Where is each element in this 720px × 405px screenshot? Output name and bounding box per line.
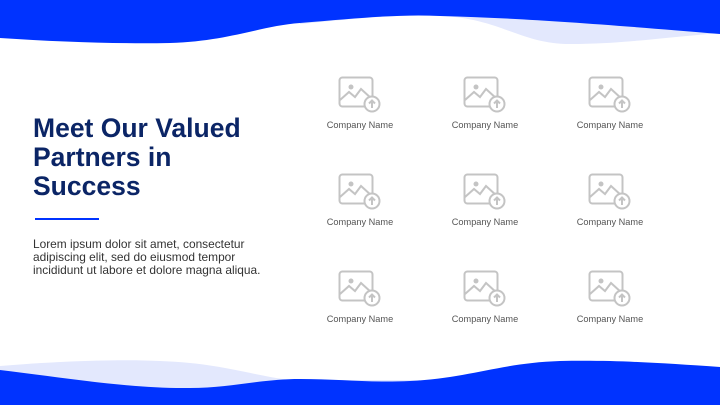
accent underline xyxy=(35,218,99,220)
partner 7: Company Name xyxy=(327,314,393,324)
partner 4: Company Name xyxy=(327,217,393,227)
description text: Lorem ipsum dolor sit amet, consectetur xyxy=(33,237,244,251)
title: Meet Our Valued xyxy=(33,113,241,143)
partner 3: Company Name xyxy=(577,120,643,130)
partner 1: Company Name xyxy=(327,120,393,130)
partner 3 xyxy=(577,76,643,130)
partner 1 xyxy=(327,76,393,130)
partner 4 xyxy=(327,174,393,227)
title: Partners in xyxy=(33,142,171,172)
partner 9: Company Name xyxy=(577,314,643,324)
partner logo grid xyxy=(327,76,643,324)
title xyxy=(33,113,241,201)
partner 8 xyxy=(452,270,518,324)
top wave xyxy=(0,0,720,44)
bottom wave xyxy=(0,360,720,405)
partner 6: Company Name xyxy=(577,217,643,227)
partner 9 xyxy=(577,270,643,324)
partner 6 xyxy=(577,174,643,227)
title: Success xyxy=(33,171,141,201)
description text: incididunt ut labore et dolore magna aliqua. xyxy=(33,263,260,277)
partner 7 xyxy=(327,270,393,324)
partner 8: Company Name xyxy=(452,314,518,324)
partner 2 xyxy=(452,76,518,130)
partner 5: Company Name xyxy=(452,217,518,227)
description text: adipiscing elit, sed do eiusmod tempor xyxy=(33,250,235,264)
description text xyxy=(33,237,260,277)
partner 2: Company Name xyxy=(452,120,518,130)
partner 5 xyxy=(452,174,518,227)
